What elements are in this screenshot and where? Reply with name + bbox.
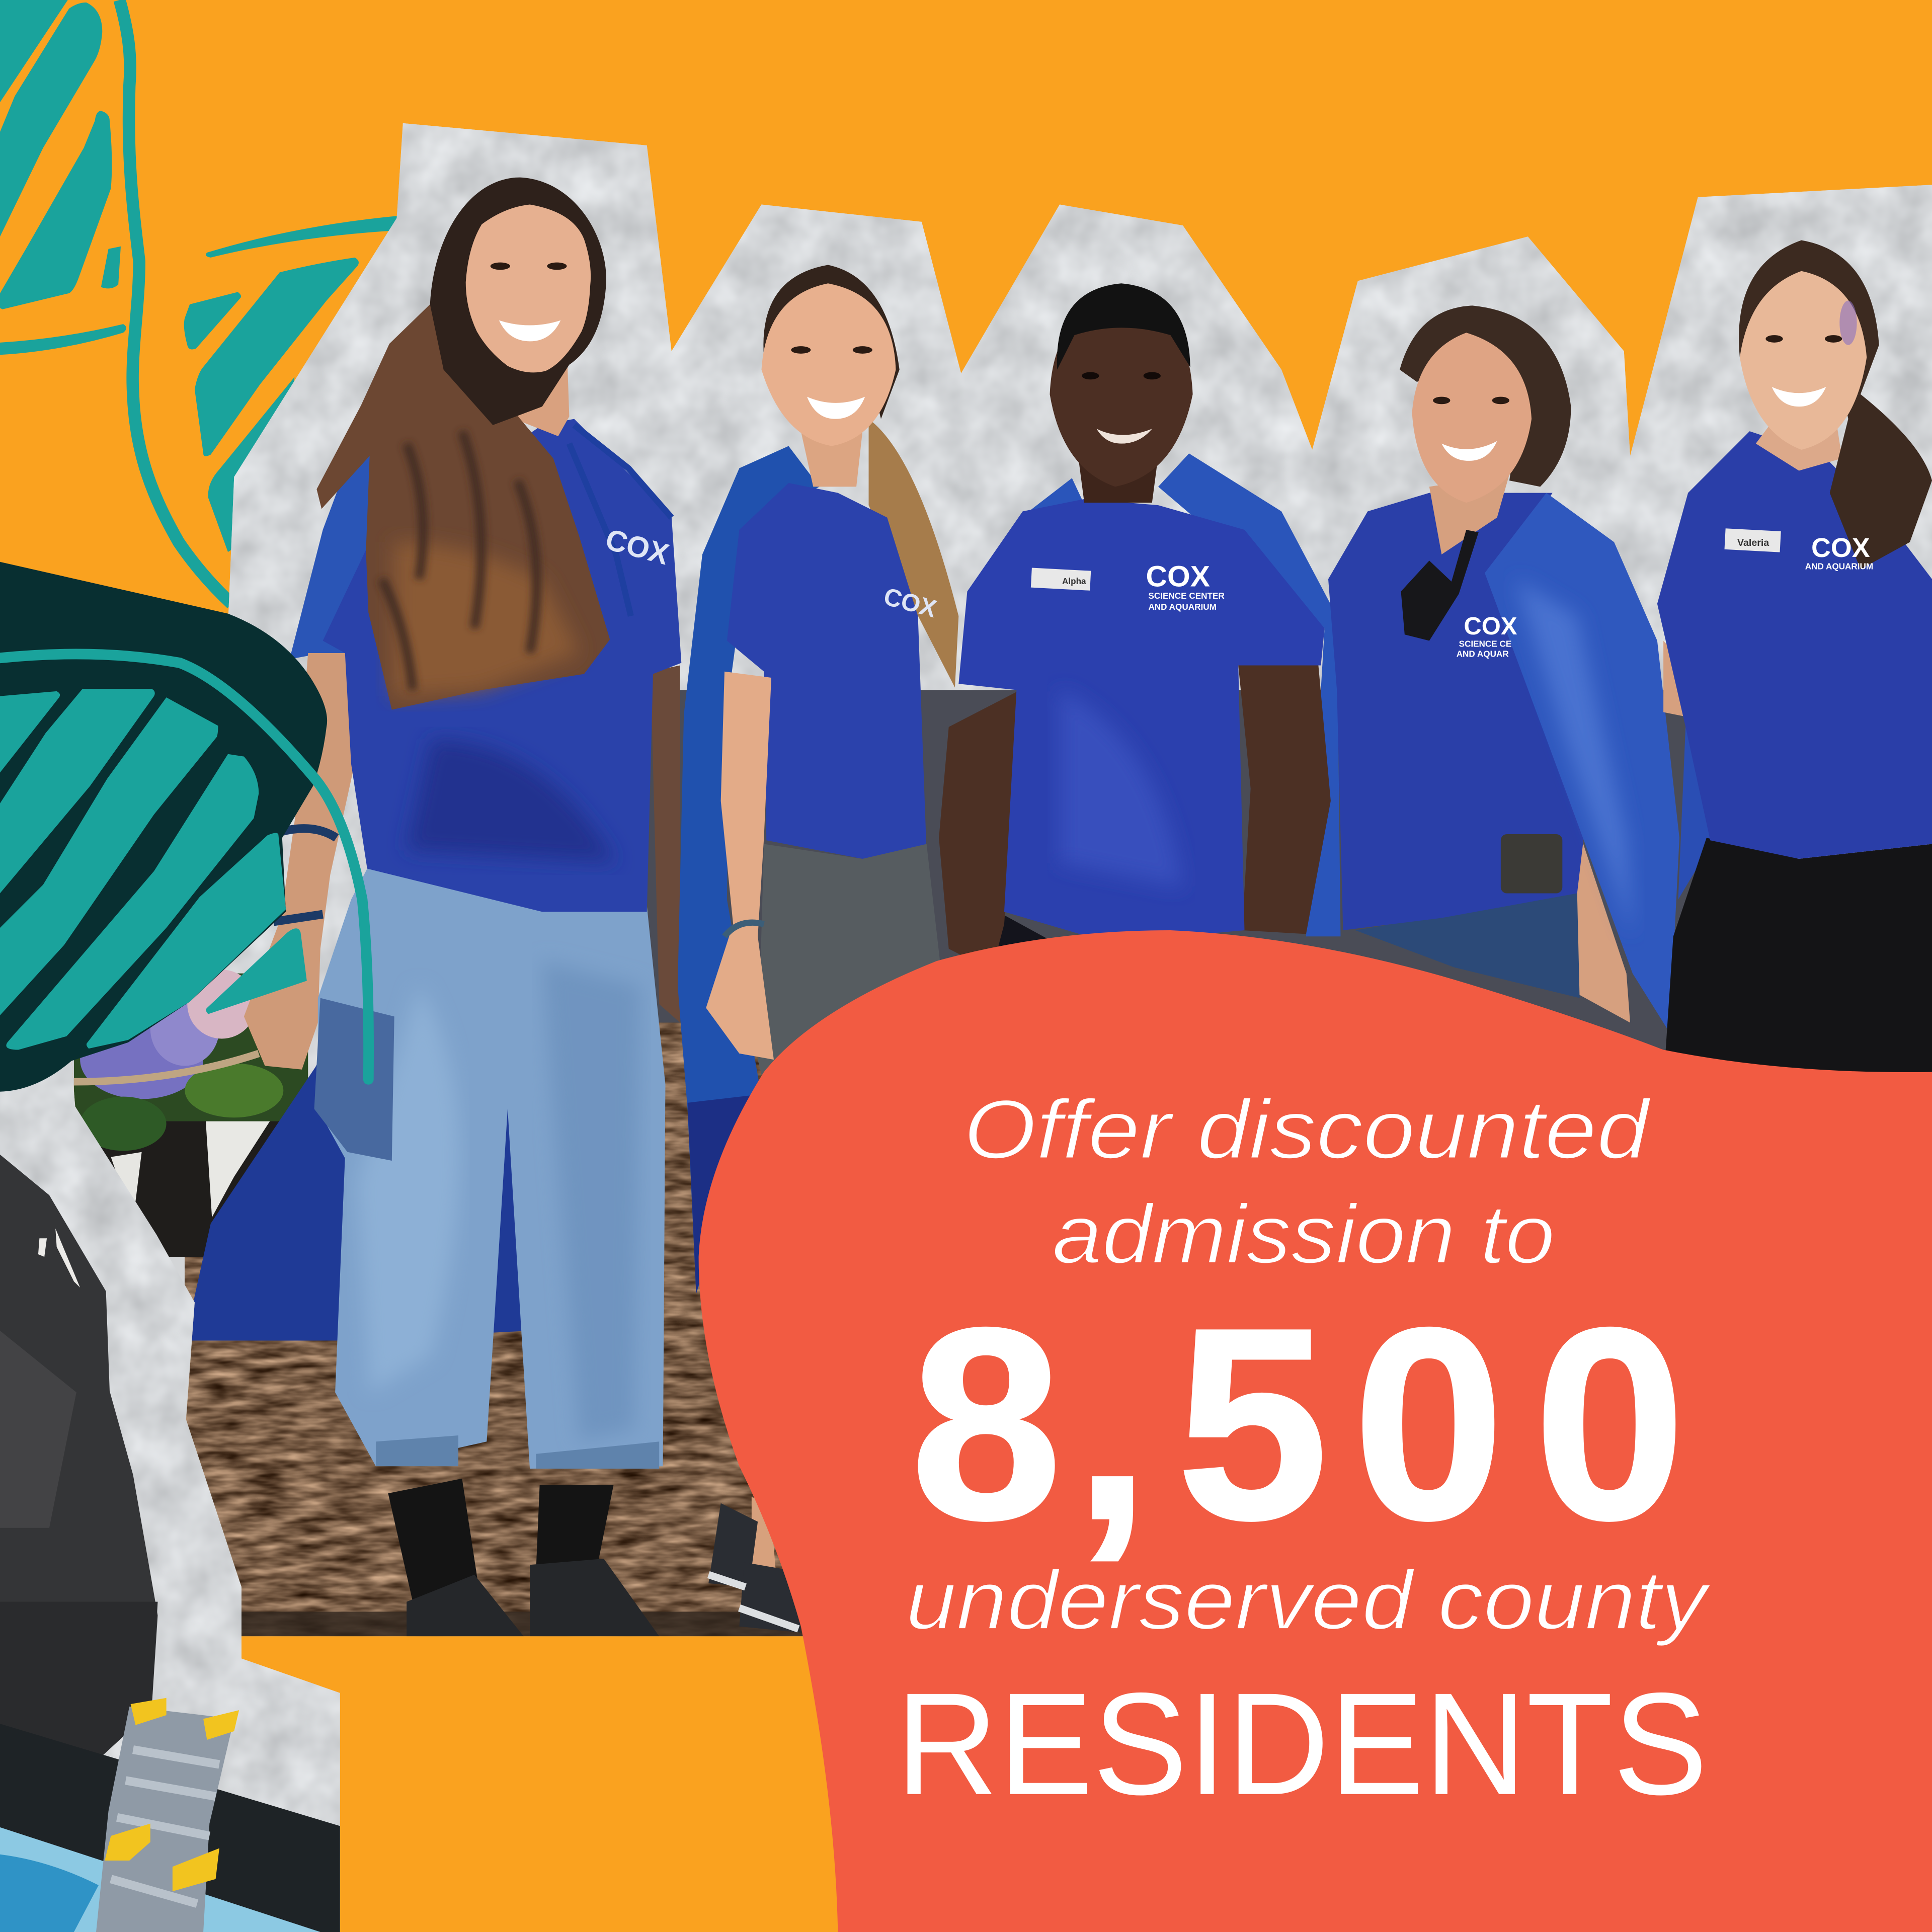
intro line 1: Offer discounted bbox=[963, 1083, 1651, 1176]
shorts bbox=[758, 844, 941, 1084]
leaf vein curve bbox=[0, 654, 369, 1079]
neck bbox=[508, 345, 569, 436]
shirt logo: AND AQUARIUM bbox=[1805, 561, 1873, 571]
cape lower bbox=[192, 1065, 521, 1340]
headline text bbox=[896, 1083, 1711, 1825]
person 5 bbox=[1657, 240, 1932, 1109]
lower felt backdrop bbox=[0, 1060, 345, 1932]
gray felt backdrop bbox=[71, 123, 1932, 1636]
face bbox=[1740, 271, 1867, 450]
arm bbox=[706, 672, 774, 1060]
walkie-talkie bbox=[1401, 530, 1479, 640]
dark teal butterfly leaf bbox=[0, 562, 369, 1092]
face bbox=[466, 205, 591, 372]
face paint bbox=[1839, 301, 1857, 345]
phone in pocket bbox=[1501, 834, 1562, 894]
right leaf rib bbox=[206, 216, 400, 258]
trousers bbox=[998, 912, 1066, 955]
coral blob panel bbox=[699, 930, 1932, 1932]
jeans bbox=[318, 869, 665, 1469]
top-left teal leaf illustration bbox=[0, 0, 400, 604]
hair: long curls bbox=[316, 304, 610, 710]
lego tower bbox=[96, 1698, 239, 1932]
cape behind bbox=[1678, 727, 1715, 900]
person 3 bbox=[939, 283, 1340, 971]
black table edge bbox=[0, 1724, 340, 1932]
residents: RESIDENTS bbox=[896, 1663, 1708, 1825]
arm bbox=[1567, 826, 1630, 1023]
name badge bbox=[1031, 568, 1091, 591]
intro line 2: admission to bbox=[1052, 1187, 1555, 1281]
right leaf stripe bbox=[195, 258, 359, 456]
neck bbox=[1756, 419, 1842, 471]
name badge: Valeria bbox=[1737, 537, 1769, 548]
cape bbox=[1485, 493, 1679, 1032]
socks bbox=[388, 1479, 614, 1602]
bracelets bbox=[274, 829, 337, 922]
hair bbox=[1739, 240, 1932, 569]
neck bbox=[801, 431, 862, 487]
cape bbox=[678, 446, 820, 1294]
water mat bbox=[0, 1827, 320, 1932]
trousers bbox=[1663, 838, 1932, 1109]
team photo bbox=[74, 178, 1932, 1639]
dark leaf body bbox=[0, 562, 327, 1092]
legs and shoes bbox=[752, 1497, 776, 1583]
shirt logo: COX bbox=[602, 523, 672, 571]
arms bbox=[939, 665, 1331, 971]
shirt bbox=[1328, 493, 1589, 930]
shirt logo: SCIENCE CENTER bbox=[1148, 591, 1225, 601]
shirt logo bbox=[1146, 560, 1225, 612]
neck bbox=[1429, 474, 1509, 554]
shoes bbox=[407, 1559, 659, 1636]
face bbox=[1412, 333, 1532, 503]
leaf rib line bbox=[0, 324, 126, 355]
ponytail bbox=[869, 419, 958, 688]
shirt logo: AND AQUARIUM bbox=[1148, 602, 1217, 612]
leaf outline stroke bbox=[120, 0, 231, 604]
hair bbox=[763, 265, 900, 419]
jeans bbox=[1355, 894, 1580, 998]
head bbox=[1050, 305, 1193, 487]
face bbox=[761, 283, 896, 446]
lower leaf stripe bbox=[208, 377, 294, 552]
cape bbox=[1158, 453, 1340, 936]
shaded background between people bbox=[647, 690, 1696, 1051]
hair: top bbox=[430, 178, 606, 425]
near arm bbox=[244, 653, 379, 1070]
hydrangeas and pots bbox=[73, 970, 308, 1257]
visitor in dark t-shirt bbox=[0, 1155, 157, 1756]
small leaf stripe bbox=[184, 292, 241, 349]
arm bbox=[1663, 640, 1707, 721]
lower-left photo: felt, visitor and robot tower bbox=[0, 1060, 345, 1932]
shirt bbox=[727, 483, 927, 859]
shirt bbox=[323, 419, 681, 912]
shirt logo: COX bbox=[881, 583, 939, 623]
big number: 8,500 bbox=[911, 1271, 1685, 1576]
person 4 bbox=[1328, 305, 1679, 1032]
shirt logo: SCIENCE CE bbox=[1459, 639, 1511, 649]
shirt logo bbox=[1457, 613, 1517, 659]
person 2 bbox=[678, 265, 958, 1633]
shirt logo: COX bbox=[1146, 560, 1210, 593]
shirt logo: AND AQUAR bbox=[1457, 649, 1509, 659]
leaf stripes bbox=[0, 689, 307, 1050]
far arm bbox=[651, 665, 680, 1023]
ground: mulch bbox=[185, 1023, 826, 1639]
shirt bbox=[958, 499, 1325, 942]
shirt logo bbox=[1805, 533, 1873, 571]
leaf stripes bbox=[0, 0, 121, 309]
cape shoulder bbox=[291, 456, 370, 658]
name badge: Alpha bbox=[1062, 576, 1086, 586]
shirt bbox=[1657, 431, 1932, 859]
person 1 bbox=[185, 178, 681, 1636]
name badge bbox=[1724, 528, 1781, 552]
outro line: underserved county bbox=[906, 1554, 1711, 1647]
shirt logo: COX bbox=[1464, 613, 1517, 640]
hair bbox=[1400, 305, 1571, 487]
neck bbox=[1078, 456, 1158, 503]
shirt logo: COX bbox=[1811, 533, 1870, 563]
